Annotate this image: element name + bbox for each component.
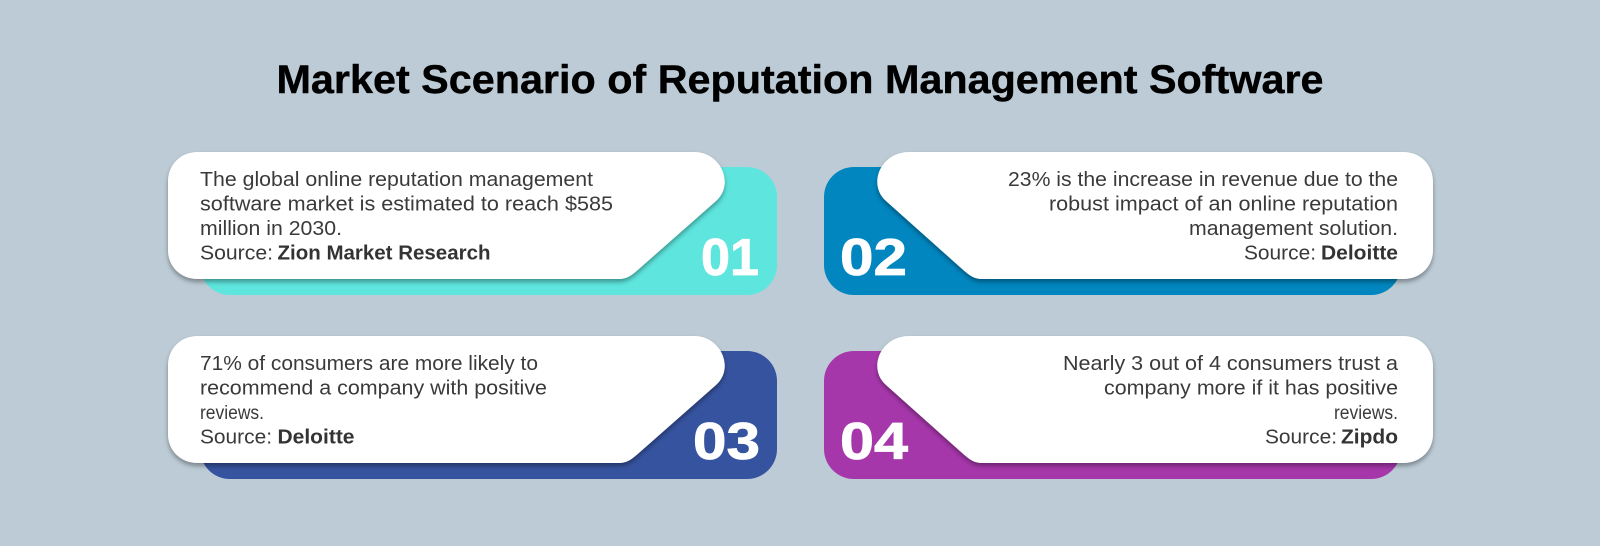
card 01 white callout xyxy=(168,152,725,279)
card 04 text: company more if it has positive xyxy=(1104,376,1398,400)
title: Market Scenario of Reputation Management Software xyxy=(276,58,1324,102)
card 01 text: Zion Market Research xyxy=(278,242,490,264)
card 01 coloured backing xyxy=(200,167,777,295)
card 03 text: 71% of consumers are more likely to xyxy=(200,352,538,375)
panel: card 04 xyxy=(824,336,1433,479)
card 02 coloured backing xyxy=(824,167,1401,295)
card 01 text xyxy=(200,168,613,264)
card 02 text xyxy=(1008,168,1398,264)
card 01 text: Source: xyxy=(200,242,273,264)
card 02 text: Source: xyxy=(1244,242,1316,264)
card 03 white callout xyxy=(168,336,725,463)
card 02 text: management solution. xyxy=(1189,217,1398,240)
card 04 text: reviews. xyxy=(1334,402,1398,424)
card 03 text: reviews. xyxy=(200,402,264,424)
card 02 text: Deloitte xyxy=(1321,242,1398,264)
card 01 text: software market is estimated to reach $585 xyxy=(200,192,613,216)
card 02 text: 23% is the increase in revenue due to the xyxy=(1008,168,1398,191)
card 04 white callout xyxy=(877,336,1433,463)
card 02 text: robust impact of an online reputation xyxy=(1049,192,1398,216)
card 03 text: recommend a company with positive xyxy=(200,376,547,400)
card 04 number: 04 xyxy=(840,412,908,470)
card 01 text: million in 2030. xyxy=(200,217,342,240)
card 04 text: Source: xyxy=(1265,426,1337,448)
card 01 text: The global online reputation management xyxy=(200,168,593,191)
card 02 white callout xyxy=(877,152,1433,279)
card 03 text: Source: xyxy=(200,426,272,448)
card 04 text xyxy=(1063,352,1399,448)
card 03 text: Deloitte xyxy=(278,426,354,448)
panel: card 01 xyxy=(168,152,777,295)
card 03 coloured backing xyxy=(200,351,777,479)
panel: card 03 xyxy=(168,336,777,479)
card 04 coloured backing xyxy=(824,351,1401,479)
card 03 text xyxy=(200,352,547,448)
card 04 text: Nearly 3 out of 4 consumers trust a xyxy=(1063,352,1399,375)
card 03 number: 03 xyxy=(693,412,760,470)
card 04 text: Zipdo xyxy=(1341,426,1398,448)
card 02 number: 02 xyxy=(840,228,907,286)
panel: card 02 xyxy=(824,152,1433,295)
card 01 number: 01 xyxy=(701,228,759,286)
